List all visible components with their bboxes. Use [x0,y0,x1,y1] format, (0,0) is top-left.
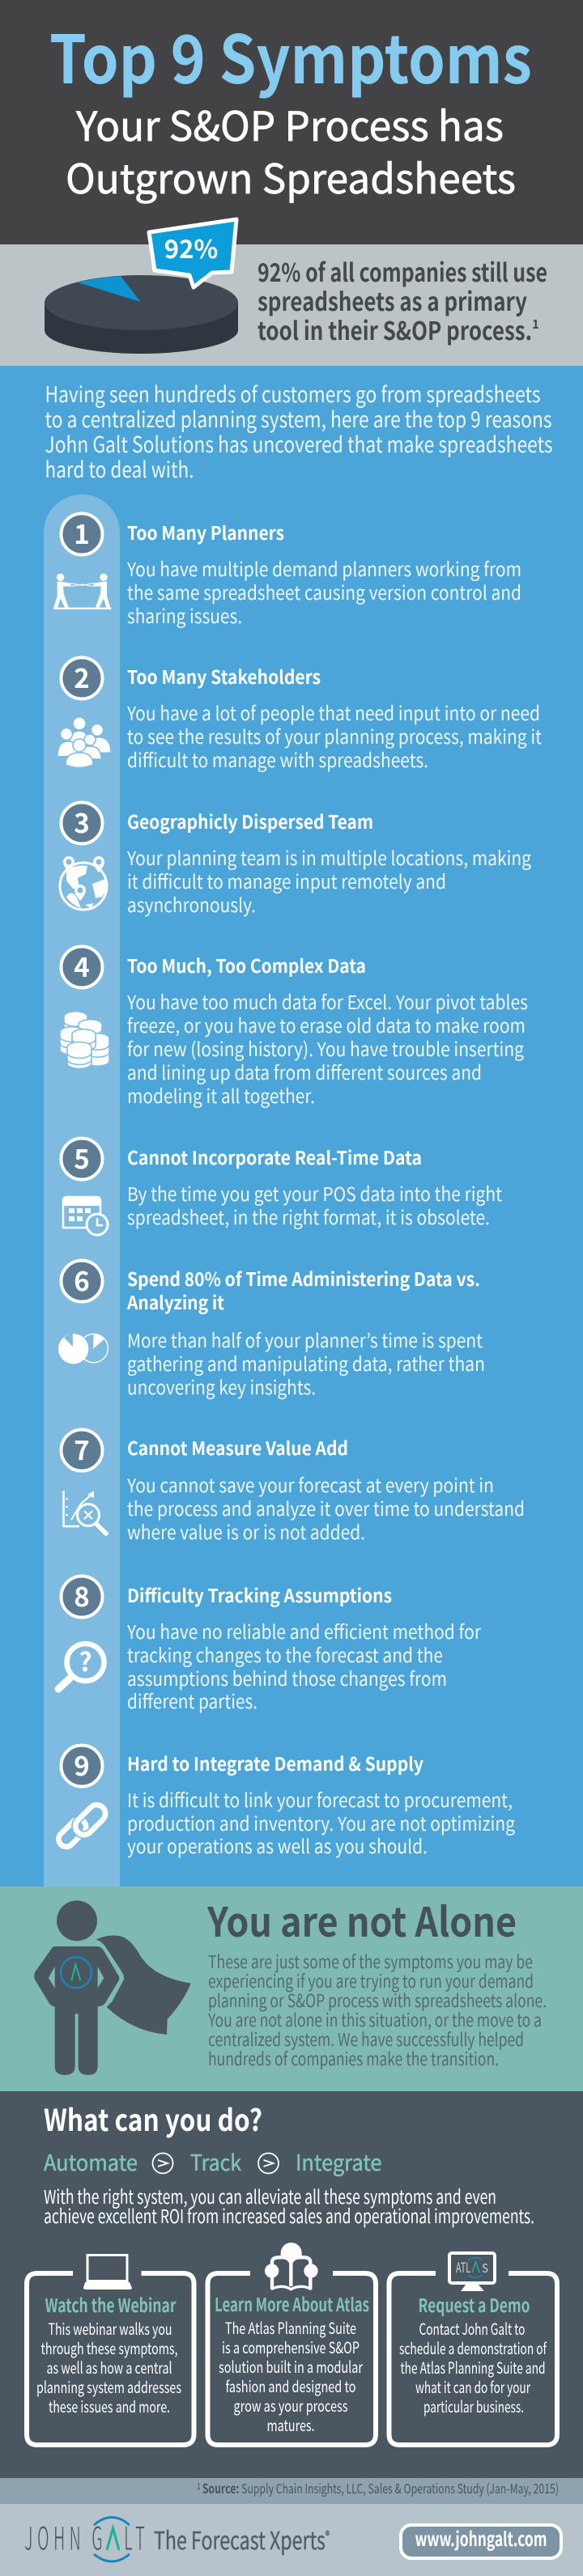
title: Top 9 Symptoms [49,6,532,103]
icon: magnifier with question mark [58,1642,104,1689]
text block: you are not alone: hundreds of companies make the transition. [208,2045,499,2071]
panel: request a demo: Contact John Galt to [419,2316,525,2340]
panel: learn more about atlas: grow as your process [233,2393,348,2417]
panel: you are not alone [34,1891,547,2075]
icon: monitor with atlas logo [449,2253,495,2291]
symptom 6: 6 [74,1260,90,1299]
steps: automate, track, integrate: Track [190,2145,241,2177]
symptom 8: tracking changes to the forecast and the [127,1640,443,1668]
symptom 4: modeling it all together. [127,1081,315,1109]
symptom 8 [62,1576,482,1714]
symptom 6: Analyzing it [126,1288,224,1315]
symptom 4: You have too much data for Excel. Your pivot tables [126,987,528,1015]
symptom 3: asynchronously. [127,890,256,918]
symptom 3 [62,802,531,918]
heading: you are not alone: You are not Alone [206,1891,517,1949]
steps: automate, track, integrate: Integrate [296,2145,382,2177]
icon: caped hero [34,1900,191,2075]
symptom 7: the process and analyze it over time to understand [127,1494,525,1521]
icon: chart under magnifier [63,1491,106,1534]
symptom 1: You have multiple demand planners working from [126,554,521,582]
symptom 6: More than half of your planner’s time is spent [127,1326,483,1353]
icon: monitor with atlas logo: ATL [456,2256,470,2277]
symptom 6: uncovering key insights. [127,1373,316,1400]
symptom 1: Too Many Planners [127,518,284,545]
symptom 4: freeze, or you have to erase old data to make room [127,1011,526,1038]
panel: learn more about atlas: Learn More About Atlas [215,2290,369,2317]
intro text: hard to deal with. [45,452,194,484]
panel: watch the webinar: these issues and more. [49,2394,170,2417]
symptom 3: Geographicly Dispersed Team [127,807,373,834]
website button [401,2523,561,2558]
symptom 1: the same spreadsheet causing version control and [127,578,521,605]
icon: calendar with clock [63,1197,108,1235]
symptom 4 [62,946,528,1109]
panel: request a demo: Request a Demo [418,2290,530,2318]
steps: automate, track, integrate [44,2145,382,2177]
symptom 9: production and inventory. You are not optimizing [127,1809,515,1836]
panel: request a demo: what it can do for your [415,2374,530,2398]
icon: monitor with atlas logo: S [482,2260,488,2277]
panel: learn more about atlas: The Atlas Planning Suite [225,2315,356,2339]
panel: request a demo: particular business. [423,2394,524,2417]
text block: 92% statistic: tool in their S&OP process. [257,311,532,347]
panel: learn more about atlas: matures. [267,2413,314,2436]
symptom 8: 8 [74,1576,90,1615]
icon: database stacks [60,1012,109,1068]
pie chart: 92 percent [45,275,238,354]
symptom 1 [62,513,521,629]
icon: two pie charts [58,1334,108,1364]
symptom 6: gathering and manipulating data, rather than [127,1349,485,1377]
text block: what can you do [44,2182,534,2229]
logo: john galt: LT [124,2513,145,2561]
title [49,6,532,206]
tagline: The Forecast Xperts [154,2521,376,2557]
icon: globe with location pins [60,856,107,910]
panel: learn more about atlas: fashion and designed to [225,2374,356,2397]
callout: 92% [149,219,236,287]
symptom 2 [62,657,542,773]
panel: learn more about atlas: is a comprehensive S&OP [222,2335,360,2358]
symptom 2: Too Many Stakeholders [127,662,321,690]
symptom 3: 3 [74,802,90,841]
panel: learn more about atlas [207,2243,376,2445]
text block: 92% statistic [257,253,547,347]
symptom 7 [62,1429,525,1545]
panel: watch the webinar: through these symptoms, [40,2336,178,2359]
symptom 5 [62,1138,502,1230]
icon: laptop [83,2255,132,2290]
symptom 2: 2 [74,657,90,696]
symptom 5: Cannot Incorporate Real-Time Data [127,1143,422,1170]
icon: tug of war [53,574,111,609]
heading: what can you do: What can you do? [44,2096,262,2140]
symptom 5: spreadsheet, in the right format, it is obsolete. [127,1203,490,1230]
symptom 7: Cannot Measure Value Add [127,1433,348,1461]
symptom 7: 7 [74,1429,90,1468]
symptom 1: sharing issues. [127,601,242,629]
title: Your S&OP Process has [75,95,504,153]
text block: you are not alone [207,1948,547,2071]
symptom 8: different parties. [127,1687,257,1714]
symptom 7: where value is or is not added. [127,1517,365,1545]
callout: 92%: 92% [164,229,218,265]
symptom 3: Your planning team is in multiple locations, making [126,843,531,871]
symptom 4: for new (losing history). You have trouble inserting [127,1034,524,1062]
symptom 6: Spend 80% of Time Administering Data vs. [127,1264,480,1292]
panel: watch the webinar: This webinar walks you [49,2316,172,2340]
symptom 8: assumptions behind those changes from [127,1664,447,1691]
symptom 6 [62,1260,485,1400]
panel: watch the webinar: as well as how a central [47,2355,172,2379]
panel: watch the webinar [27,2255,194,2445]
icon: chain links [56,1802,109,1850]
symptom 8: Difficulty Tracking Assumptions [127,1581,392,1608]
logo: john galt: JOHN [24,2513,81,2561]
symptom 4: and lining up data from different sources and [127,1058,482,1085]
symptom 9: It is difficult to link your forecast to procurement, [127,1785,513,1813]
symptom 5: By the time you get your POS data into the right [127,1179,502,1207]
symptom 2: You have a lot of people that need input into or need [126,698,540,726]
logo: john galt [24,2513,145,2561]
text block: 92% statistic: 1 [532,316,539,333]
symptom 2: to see the results of your planning process, making it [127,722,542,749]
logo: john galt: G [91,2513,103,2561]
icon: magnifier with question mark: ? [79,1642,92,1679]
panel: watch the webinar: planning system addresses [36,2374,181,2398]
symptom 4: Too Much, Too Complex Data [127,951,366,978]
symptom 3: it difficult to manage input remotely and [127,867,446,894]
panel: learn more about atlas: solution built in a modular [219,2354,363,2378]
icon: person reading book [265,2243,318,2290]
tagline: ® [326,2527,330,2544]
symptom 8: You have no reliable and efficient method for [126,1617,482,1644]
symptom 9 [62,1745,515,1859]
steps: automate, track, integrate: Automate [44,2145,138,2177]
source note: 1 [197,2480,201,2493]
title: Outgrown Spreadsheets [66,147,516,206]
symptom 5: 5 [74,1138,90,1177]
symptom 9: 9 [74,1745,90,1784]
symptom 9: Hard to Integrate Demand & Supply [127,1749,423,1776]
icon: group of people [57,717,111,767]
symptom 7: You cannot save your forecast at every point in [126,1470,494,1498]
source note: Source: [202,2478,239,2497]
symptom 9: your operations as well as you should. [127,1831,428,1859]
symptom 2: difficult to manage with spreadsheets. [127,745,428,773]
intro text [45,377,552,484]
symptom 4: 4 [74,946,90,985]
text block: 92% statistic: spreadsheets as a primary [257,282,527,318]
panel: watch the webinar: Watch the Webinar [45,2290,177,2318]
symptom column [44,494,120,1886]
symptom 1: 1 [74,513,90,552]
panel: request a demo [389,2253,557,2445]
